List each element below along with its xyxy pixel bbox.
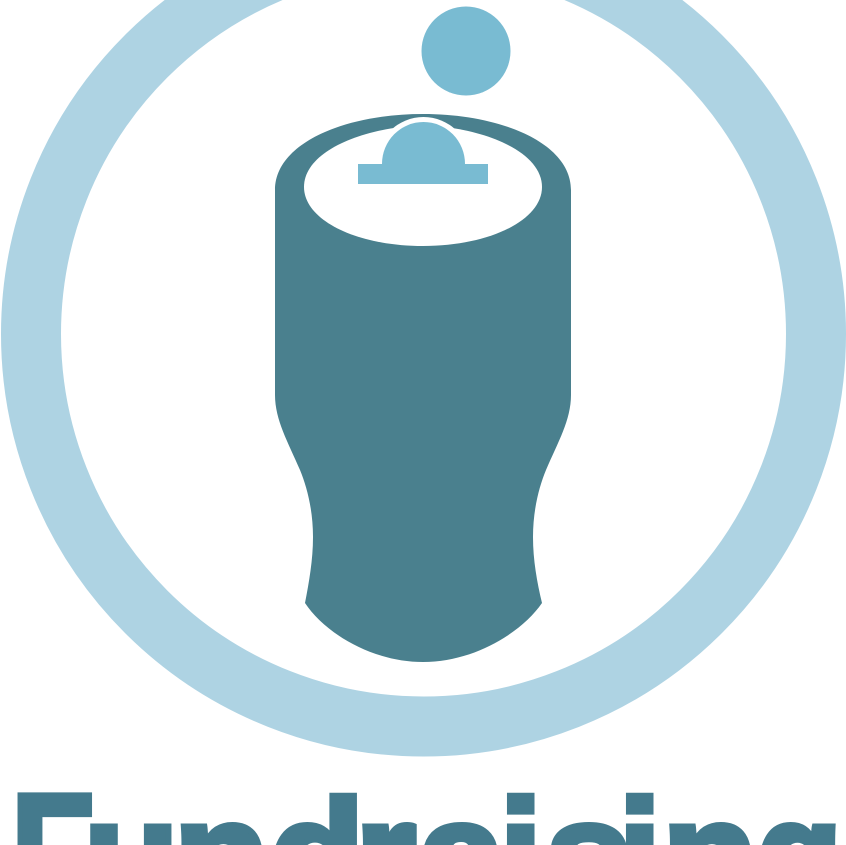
icon: person figure in cup [358, 122, 488, 184]
ring [31, 0, 816, 726]
icon: collection cup [275, 114, 571, 662]
icon: falling coin head [422, 6, 510, 96]
